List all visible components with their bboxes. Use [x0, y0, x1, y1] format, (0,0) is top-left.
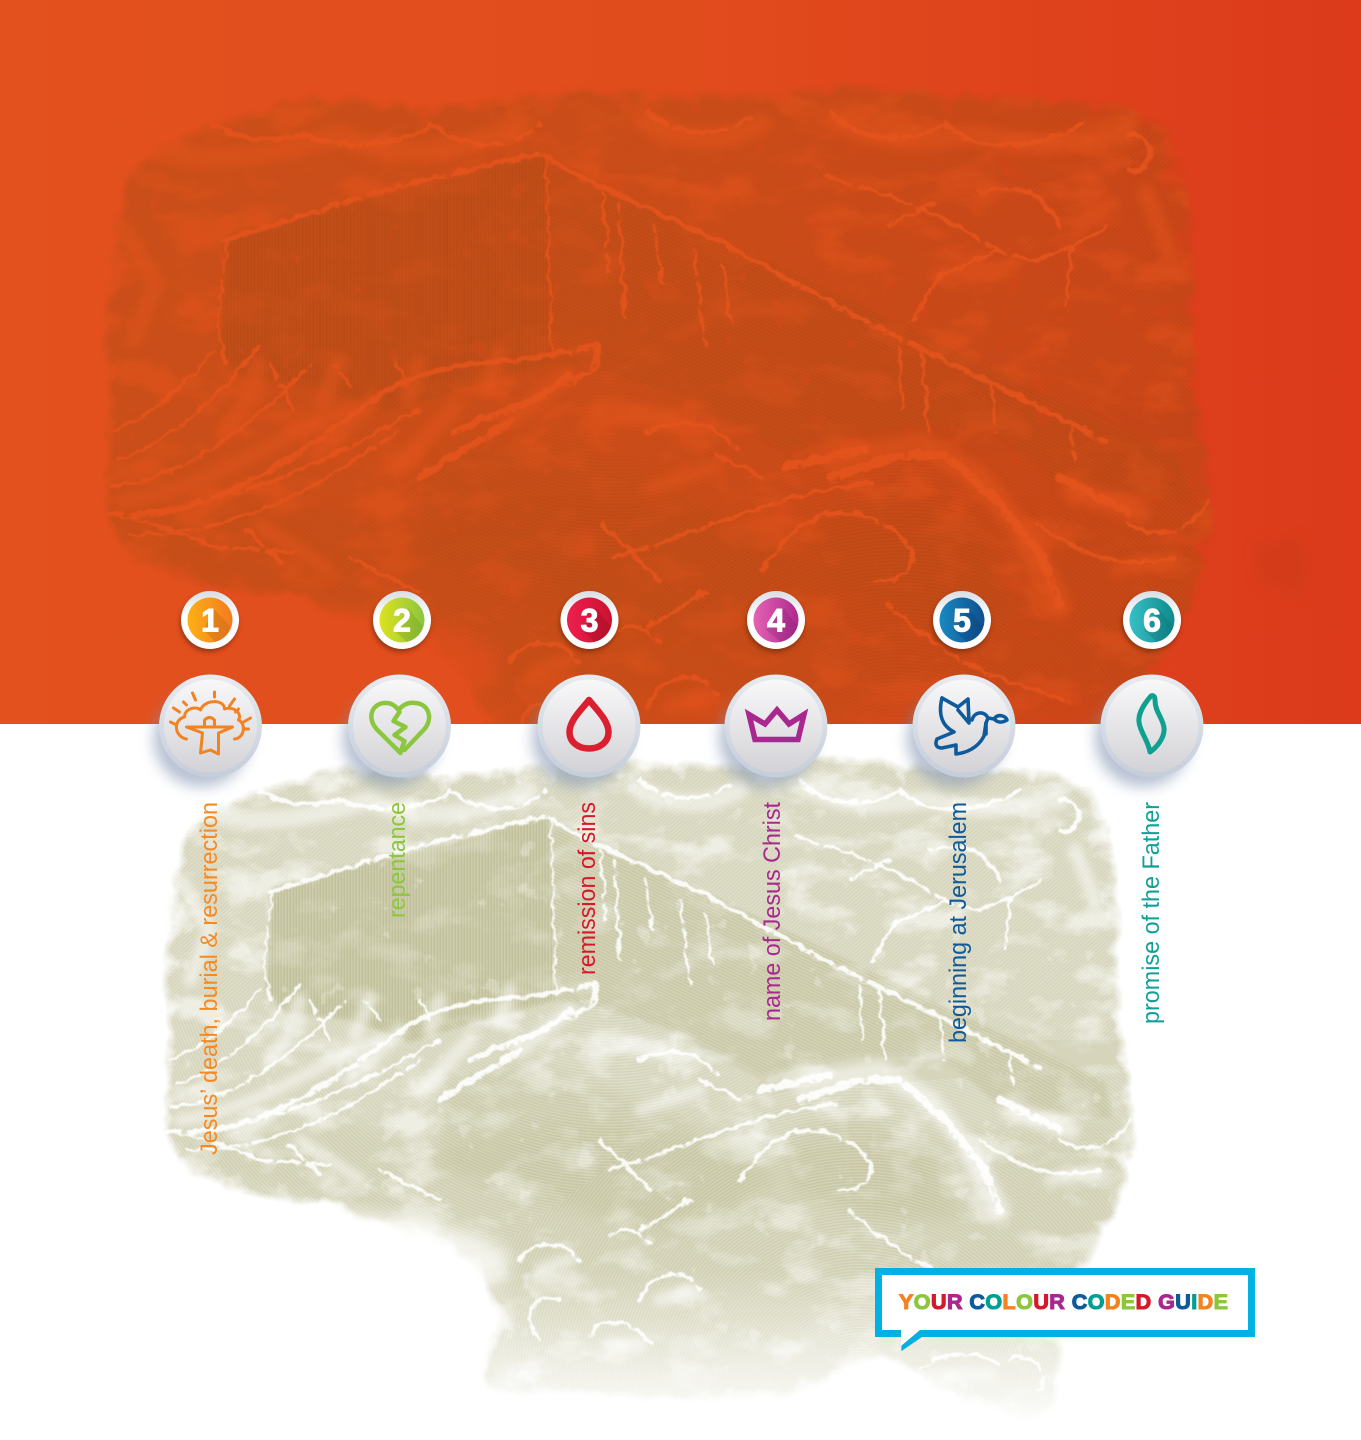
- icon button 1: risen Christ and cloud: [154, 674, 262, 787]
- vertical label: Jesus' death, burial & resurrection: Jesus’ death, burial & resurrection: [196, 802, 223, 1155]
- vertical label: name of Jesus Christ: name of Jesus Christ: [759, 802, 786, 1021]
- icon button 3: blood drop: [532, 674, 640, 787]
- number badge 5: 5: [953, 602, 971, 638]
- number badge 3: 3: [581, 602, 598, 638]
- flame: [1139, 696, 1164, 752]
- white lower panel: [0, 724, 1361, 1440]
- number badge 2: [372, 591, 431, 652]
- vertical label: promise of the Father: promise of the Father: [1138, 802, 1165, 1024]
- vertical label: remission of sins: remission of sins: [574, 802, 601, 975]
- ark engraving on red panel: [30, 20, 1289, 890]
- number badge 6: 6: [1143, 602, 1161, 638]
- crown: [749, 710, 804, 740]
- icon button 2: broken heart: [342, 674, 451, 787]
- number badge 1: [180, 591, 239, 652]
- wall stain: [1255, 535, 1312, 600]
- icon button 6: flame: [1095, 674, 1204, 787]
- number badge 3: [560, 591, 618, 652]
- number badge 5: [932, 591, 991, 652]
- number badge 6: [1122, 591, 1181, 652]
- icon button 5: dove with olive branch: [907, 674, 1016, 787]
- guide title: YOUR COLOUR CODED GUIDE: [899, 1290, 1228, 1314]
- icon button 4: crown: [719, 674, 828, 787]
- drop: [570, 700, 608, 748]
- top red panel: [0, 0, 1361, 724]
- ark engraving on white panel: [100, 700, 1200, 1440]
- speech bubble: your colour coded guide: [878, 1272, 1252, 1351]
- vertical label: beginning at Jerusalem: beginning at Jerusalem: [945, 802, 972, 1043]
- vertical label: repentance: repentance: [384, 802, 411, 918]
- number badge 4: 4: [767, 602, 785, 638]
- number badge 2: 2: [393, 602, 411, 638]
- number badge 1: 1: [201, 602, 219, 638]
- number badge 4: [746, 591, 805, 652]
